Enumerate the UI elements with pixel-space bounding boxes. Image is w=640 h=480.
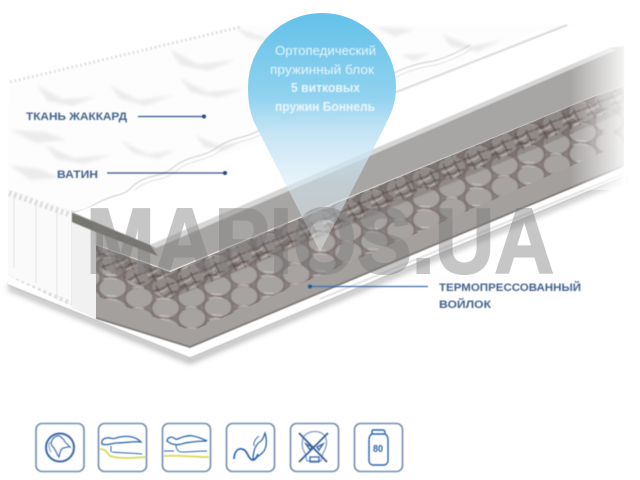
icon: density 80 block: 80 (373, 444, 383, 455)
white batting layer (72, 28, 610, 245)
balloon text (270, 44, 376, 114)
stitched top edge (10, 27, 240, 82)
balloon text: Ортопедический (275, 44, 376, 58)
lower felt layer (96, 140, 624, 347)
drop shadow under mattress (8, 177, 623, 364)
side panel (8, 188, 72, 308)
icon: globe (36, 424, 84, 472)
label: jacquard fabric: ТКАНЬ ЖАККАРД (26, 111, 127, 123)
white corner pillar (72, 222, 96, 318)
mattress illustration (8, 25, 630, 364)
label: jacquard fabric (26, 111, 206, 123)
upper felt band (72, 46, 624, 271)
icon: body on mattress, side (98, 424, 146, 472)
quilt pattern (10, 27, 502, 180)
balloon text: 5 витковых (291, 81, 360, 95)
label: thermopressed felt: ВОЙЛОК (439, 298, 491, 311)
label: thermopressed felt (308, 281, 581, 311)
spring block (90, 80, 630, 340)
label: batting: ВАТИН (57, 169, 98, 181)
icon: density 80 block (354, 424, 402, 472)
balloon text: пружинный блок (270, 63, 375, 77)
callout balloon: spring block (248, 13, 396, 252)
bottom white strip (8, 166, 623, 358)
icon: natural leaf (226, 424, 274, 472)
balloon text: пружин Боннель (275, 100, 375, 114)
dark streak (72, 213, 158, 256)
icon: body on mattress, back (162, 424, 210, 472)
quilt front edge wave (72, 45, 470, 212)
icon row (36, 424, 402, 472)
label: thermopressed felt: ТЕРМОПРЕССОВАННЫЙ (439, 281, 581, 294)
watermark: MAPIOS.UA (86, 189, 554, 293)
right edge fade (570, 40, 626, 190)
quilted top surface (8, 25, 575, 212)
label: batting (57, 169, 227, 181)
icon: crossed-out gas mask (290, 424, 338, 472)
